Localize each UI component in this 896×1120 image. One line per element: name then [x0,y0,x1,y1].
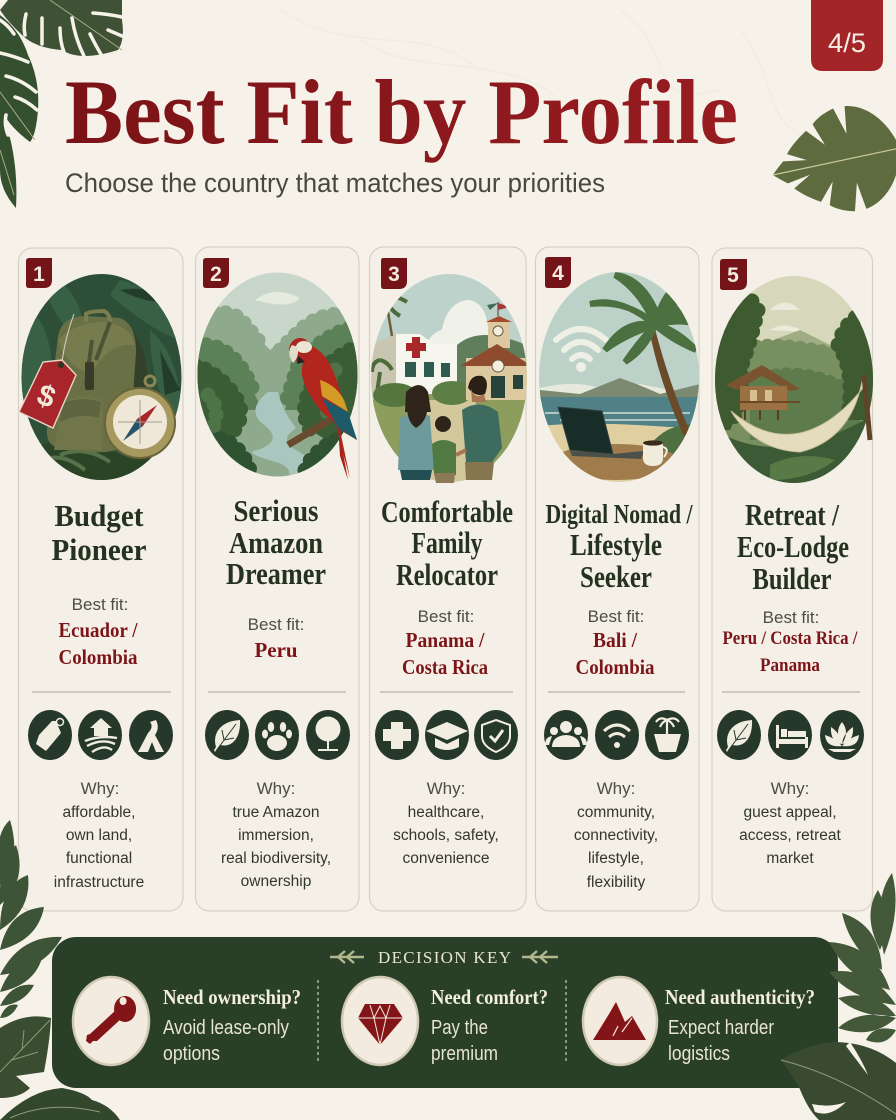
foliage: bottom-right fern [829,873,896,1042]
heading: Builder [752,561,832,596]
icons: tag, land, road [28,710,173,760]
icon: mountains [593,1002,646,1040]
panel: card 2 amazon dreamer [195,247,360,911]
why: connectivity, [574,827,658,844]
title: Best Fit by Profile [65,61,738,163]
heading: Family [412,525,483,560]
foliage: bottom-right broad leaf [781,1042,896,1120]
why: functional [66,850,132,867]
why [739,779,842,867]
why: own land, [66,827,132,844]
coffee cup [643,440,667,466]
why: lifestyle, [588,850,644,867]
heading [737,497,849,596]
why: flexibility [587,874,646,891]
why: Why: [81,779,119,798]
foliage: bottom-left broad leaves [0,1016,120,1120]
best fit: Colombia [576,655,655,679]
key item: ownership: options [163,1043,220,1065]
panel: card 3 family relocator [368,247,532,911]
foliage: top-right leaf [762,97,896,226]
why: ownership [241,873,311,890]
panel: card 4 digital nomad [536,247,703,911]
heading: Pioneer [52,532,147,567]
best fit: Panama / [406,628,486,652]
why: market [766,850,814,867]
macaw [302,345,357,478]
compass [105,388,175,458]
why: true Amazon [232,804,320,821]
why [54,779,144,891]
why [574,779,658,891]
heading: Dreamer [226,556,326,591]
decision key heading: DECISION KEY [378,948,511,967]
palm [387,311,394,336]
key item: authenticity: logistics [668,1043,730,1065]
page badge: 4/5 [828,28,866,58]
badge 5: 5 [727,264,739,287]
key item: comfort: Pay the [431,1017,488,1039]
why: infrastructure [54,874,144,891]
family [405,385,431,412]
heading [546,499,693,594]
laptop [558,407,613,454]
best fit: Best fit: [588,607,644,626]
badge 4 [545,257,571,288]
key item: comfort: premium [431,1043,498,1065]
decision key heading [330,948,558,967]
best fit [722,608,858,676]
illustration: backpack, tag and compass: $ [33,378,60,415]
palm [590,275,700,436]
why: community, [577,804,655,821]
why: real biodiversity, [221,850,331,867]
table [563,444,674,480]
why: convenience [402,850,490,867]
key item: authenticity [583,977,815,1065]
lodge [726,365,800,391]
branch [288,420,330,445]
foliage: bottom-left fern [0,820,62,1018]
key item: authenticity: Expect harder [668,1017,774,1039]
best fit [402,607,488,679]
backpack [118,322,147,440]
why [221,779,331,890]
illustration: lodge and hammock [712,270,877,490]
badge 3 [381,258,407,289]
heading: Eco-Lodge [737,529,849,564]
why: affordable, [63,804,135,821]
hammock [731,382,866,452]
best fit: Best fit: [248,615,304,634]
why: immersion, [238,827,314,844]
best fit: Ecuador / [58,618,139,642]
best fit: Best fit: [763,608,819,627]
heading [381,494,513,592]
why: schools, safety, [393,827,499,844]
heading [226,493,326,591]
heading: Digital Nomad / [546,499,693,529]
icons: leaf, paw, tree [205,710,350,760]
hospital [372,334,396,394]
badge 4: 4 [552,262,564,285]
key item: ownership: Avoid lease-only [163,1017,289,1039]
key item: ownership: Need ownership? [163,985,301,1009]
why: Why: [597,779,635,798]
key item: ownership [73,977,301,1065]
badge 3: 3 [388,263,400,286]
icons: community, wifi, palm pot [544,710,689,760]
why: Why: [771,779,809,798]
heading: Serious [234,493,318,528]
price tag [19,360,76,428]
illustration: hospital, school and family [368,270,532,485]
icons: cross, graduation cap, shield [375,710,518,760]
best fit: Panama [760,655,820,676]
why: guest appeal, [743,804,837,821]
heading: Seeker [580,559,652,594]
badge 2 [203,258,229,288]
key item: comfort [342,977,548,1065]
badge 2: 2 [210,263,222,286]
why: Why: [427,779,465,798]
school [488,320,510,348]
best fit: Peru [254,638,298,662]
panel: card 1 budget pioneer [18,248,185,911]
heading: Amazon [229,525,323,560]
why: access, retreat [739,827,842,844]
heading: Lifestyle [570,527,662,562]
badge 1: 1 [33,263,45,286]
icon: diamond [358,1004,403,1045]
best fit: Costa Rica [402,655,488,679]
best fit [248,615,304,662]
heading: Budget [54,498,144,533]
best fit: Bali / [593,628,638,652]
heading: Comfortable [381,494,513,529]
heading: Relocator [396,557,498,592]
page badge [811,0,883,71]
best fit [576,607,655,679]
icons: leaf, bed, lotus [717,710,864,760]
why: Why: [257,779,295,798]
icon: key [86,996,136,1044]
foliage: top-left leaves [0,0,123,208]
heading: Retreat / [745,497,839,532]
best fit: Best fit: [418,607,474,626]
badge 5 [720,259,747,290]
key item: comfort: Need comfort? [431,985,548,1009]
panel: decision key [52,937,838,1088]
why [393,779,499,867]
panel: card 5 eco-lodge builder [712,248,877,911]
best fit: Colombia [58,645,138,669]
best fit [58,595,139,669]
best fit: Best fit: [72,595,128,614]
heading [52,498,147,567]
why: healthcare, [408,804,484,821]
key item: authenticity: Need authenticity? [665,985,815,1009]
illustration: backpack, tag and compass [19,270,185,490]
badge 1 [26,258,52,288]
illustration: river and macaw [195,270,360,482]
best fit: Peru / Costa Rica / [722,628,858,649]
wifi signal [556,329,606,359]
subtitle: Choose the country that matches your priorities [65,168,605,198]
illustration: laptop on the beach with palm [538,270,703,485]
